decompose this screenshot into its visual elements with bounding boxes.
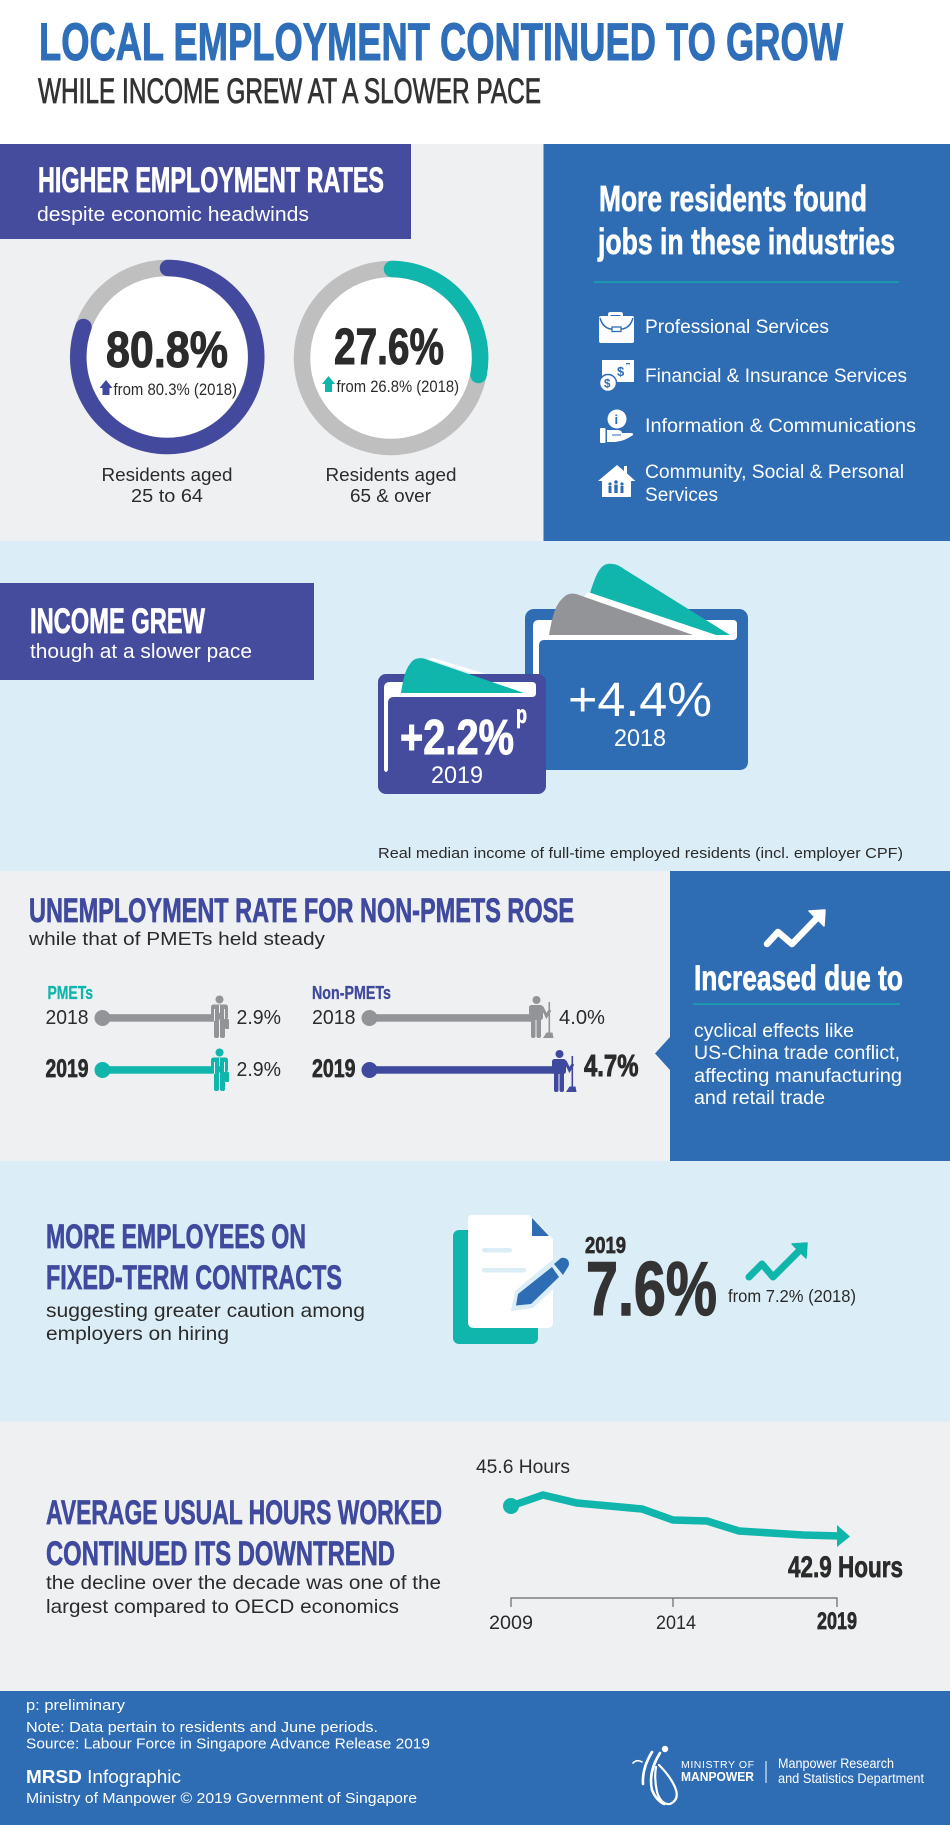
text: income note: Real median income of full-time employed residents (incl. employer CPF) — [378, 845, 903, 862]
icon: cleaner grey — [529, 996, 554, 1038]
text: suggesting caution: suggesting greater caution among — [46, 1300, 365, 1322]
logo: ministry of manpower: and Statistics Department — [778, 1771, 924, 1786]
heading: average usual hours — [46, 1494, 442, 1573]
donut: residents aged 65 and over: Residents aged — [326, 464, 456, 485]
icon: suited worker grey — [211, 996, 229, 1038]
donut: residents aged 25 to 64: 25 to 64 — [131, 485, 203, 506]
footer — [0, 1691, 950, 1825]
donut: residents aged 25 to 64 — [70, 260, 264, 506]
stat: 7.6%: 7.6% — [586, 1247, 717, 1332]
chart: non-PMETs: 4.0% — [559, 1007, 605, 1029]
chart: non-PMETs: Non-PMETs — [312, 983, 391, 1003]
title: WHILE INCOME GREW AT A SLOWER PACE — [38, 71, 541, 111]
icon: small wallet 2019 — [378, 658, 546, 794]
text: notes and source: Source: Labour Force in Singapore Advance Release 2019 — [26, 1736, 430, 1752]
donut: residents aged 65 and over — [294, 261, 488, 506]
text: community, social and personal services — [645, 462, 904, 506]
chart: PMETs: 2018 — [46, 1007, 88, 1029]
icon: document with pen — [453, 1215, 571, 1344]
text: credit — [26, 1766, 417, 1807]
icon: cleaner indigo — [552, 1050, 576, 1092]
chart: PMETs: 2.9% — [236, 1059, 281, 1081]
banner: income grew: though at a slower pace — [30, 641, 252, 663]
donut: residents aged 65 and over: 65 & over — [350, 485, 431, 506]
icon: information in hand: i — [614, 412, 618, 427]
logo: ministry of manpower: Manpower Research — [778, 1756, 894, 1771]
panel: fixed-term contracts — [0, 1161, 950, 1422]
banner: income grew — [0, 583, 314, 680]
stat: 7.6%: 2019 — [585, 1232, 626, 1258]
text: causes: cyclical effects like — [694, 1021, 854, 1042]
icon: large wallet 2018 — [525, 564, 748, 773]
heading: more employees on fixed-term contracts: FIXED-TERM CONTRACTS — [46, 1259, 342, 1297]
logo: ministry of manpower — [633, 1746, 924, 1804]
text: causes: and retail trade — [694, 1088, 825, 1109]
icon: teal rising arrow — [749, 1243, 807, 1277]
logo mark — [633, 1746, 677, 1804]
line chart: hours worked: 2014 — [656, 1613, 696, 1634]
icon: money note and coin: $ — [617, 364, 625, 379]
icon: information in hand — [600, 410, 633, 443]
chart: non-PMETs: 2019 — [312, 1055, 356, 1083]
donut: residents aged 65 and over: 27.6% — [334, 318, 444, 375]
icon: large wallet 2018: 2018 — [614, 725, 666, 752]
stat: 7.6% — [585, 1232, 717, 1332]
text: suggesting caution — [46, 1300, 365, 1345]
heading: unemployment rate — [28, 892, 574, 949]
icon: small wallet 2019: +2.2% — [400, 711, 514, 765]
panel: hours worked — [0, 1422, 950, 1692]
heading: more residents found jobs — [597, 178, 895, 262]
text: decline over the decade: the decline over the decade was one of the — [46, 1572, 441, 1594]
donut: residents aged 25 to 64: 80.8% — [106, 321, 228, 378]
heading: unemployment rate: while that of PMETs held steady — [28, 928, 326, 949]
heading: more employees on fixed-term contracts — [46, 1218, 342, 1297]
text: credit: MRSD Infographic — [26, 1766, 181, 1787]
heading: unemployment rate: UNEMPLOYMENT RATE FOR NON-PMETS ROSE — [29, 892, 574, 930]
donut: residents aged 25 to 64: from 80.3% (2018) — [114, 380, 237, 399]
chart: non-PMETs: 2018 — [312, 1007, 356, 1029]
banner: income grew: INCOME GREW — [30, 602, 205, 641]
text: credit: Ministry of Manpower © 2019 Government of Singapore — [26, 1790, 417, 1807]
text: decline over the decade: largest compared to OECD economics — [46, 1596, 399, 1618]
panel: unemployment — [0, 871, 950, 1161]
text: information and communications: Information & Communications — [645, 416, 916, 437]
chart: non-PMETs: 4.7% — [584, 1048, 638, 1083]
icon: suited worker teal — [211, 1048, 229, 1091]
text: notes and source: Note: Data pertain to residents and June periods. — [26, 1719, 378, 1736]
banner: higher employment rates: despite economic headwinds — [37, 204, 309, 226]
panel: higher employment rates — [0, 144, 544, 541]
banner: higher employment rates: HIGHER EMPLOYMENT RATES — [38, 161, 384, 200]
text: notes and source: p: preliminary — [26, 1697, 126, 1714]
heading: average usual hours: CONTINUED ITS DOWNTREND — [46, 1535, 395, 1573]
icon: small wallet 2019: 2019 — [431, 762, 483, 789]
logo: ministry of manpower: MINISTRY OF — [681, 1759, 754, 1771]
chart: PMETs: 2.9% — [236, 1007, 281, 1029]
title — [38, 13, 843, 111]
line chart: hours worked: 42.9 Hours — [788, 1551, 903, 1584]
chart: PMETs: 2019 — [46, 1055, 88, 1083]
panel: income grew — [0, 541, 950, 871]
text: community, social and personal services: Services — [645, 485, 718, 506]
text: financial and insurance services: Financial & Insurance Services — [645, 366, 907, 387]
donut: residents aged 65 and over: from 26.8% (2018) — [336, 377, 459, 396]
icon: rising arrow — [767, 910, 825, 944]
line chart: hours worked: 2009 — [489, 1613, 533, 1634]
icon: house with family — [598, 465, 636, 497]
text: professional services: Professional Services — [645, 317, 829, 338]
panel: industries — [544, 144, 950, 541]
callout: increased due to — [655, 871, 950, 1161]
logo: ministry of manpower: MANPOWER — [681, 1769, 755, 1784]
text: decline over the decade — [46, 1572, 441, 1618]
chart: non-PMETs — [312, 983, 638, 1092]
banner: higher employment rates — [0, 144, 411, 239]
text: causes — [694, 1021, 902, 1109]
donut: residents aged 25 to 64: Residents aged — [102, 464, 232, 485]
icon: money note and coin: $ — [604, 378, 611, 390]
line chart: hours worked: 2019 — [817, 1608, 857, 1635]
icon: large wallet 2018: +4.4% — [568, 674, 712, 727]
chart: PMETs — [46, 983, 281, 1091]
line chart: hours worked — [476, 1456, 903, 1635]
heading: more employees on fixed-term contracts: MORE EMPLOYEES ON — [46, 1218, 306, 1256]
text: suggesting caution: employers on hiring — [46, 1323, 229, 1345]
text: causes: affecting manufacturing — [694, 1066, 902, 1087]
text: community, social and personal services: Community, Social & Personal — [645, 462, 904, 483]
line chart: hours worked: 45.6 Hours — [476, 1456, 570, 1478]
text: causes: US-China trade conflict, — [694, 1043, 900, 1064]
heading: average usual hours: AVERAGE USUAL HOURS WORKED — [46, 1494, 442, 1532]
text: from 7.2%: from 7.2% (2018) — [728, 1286, 856, 1306]
chart: PMETs: PMETs — [48, 983, 93, 1003]
icon: briefcase — [599, 312, 634, 343]
text: notes and source — [26, 1697, 430, 1752]
icon: money note and coin — [600, 360, 634, 392]
icon: small wallet 2019: p — [516, 701, 527, 729]
